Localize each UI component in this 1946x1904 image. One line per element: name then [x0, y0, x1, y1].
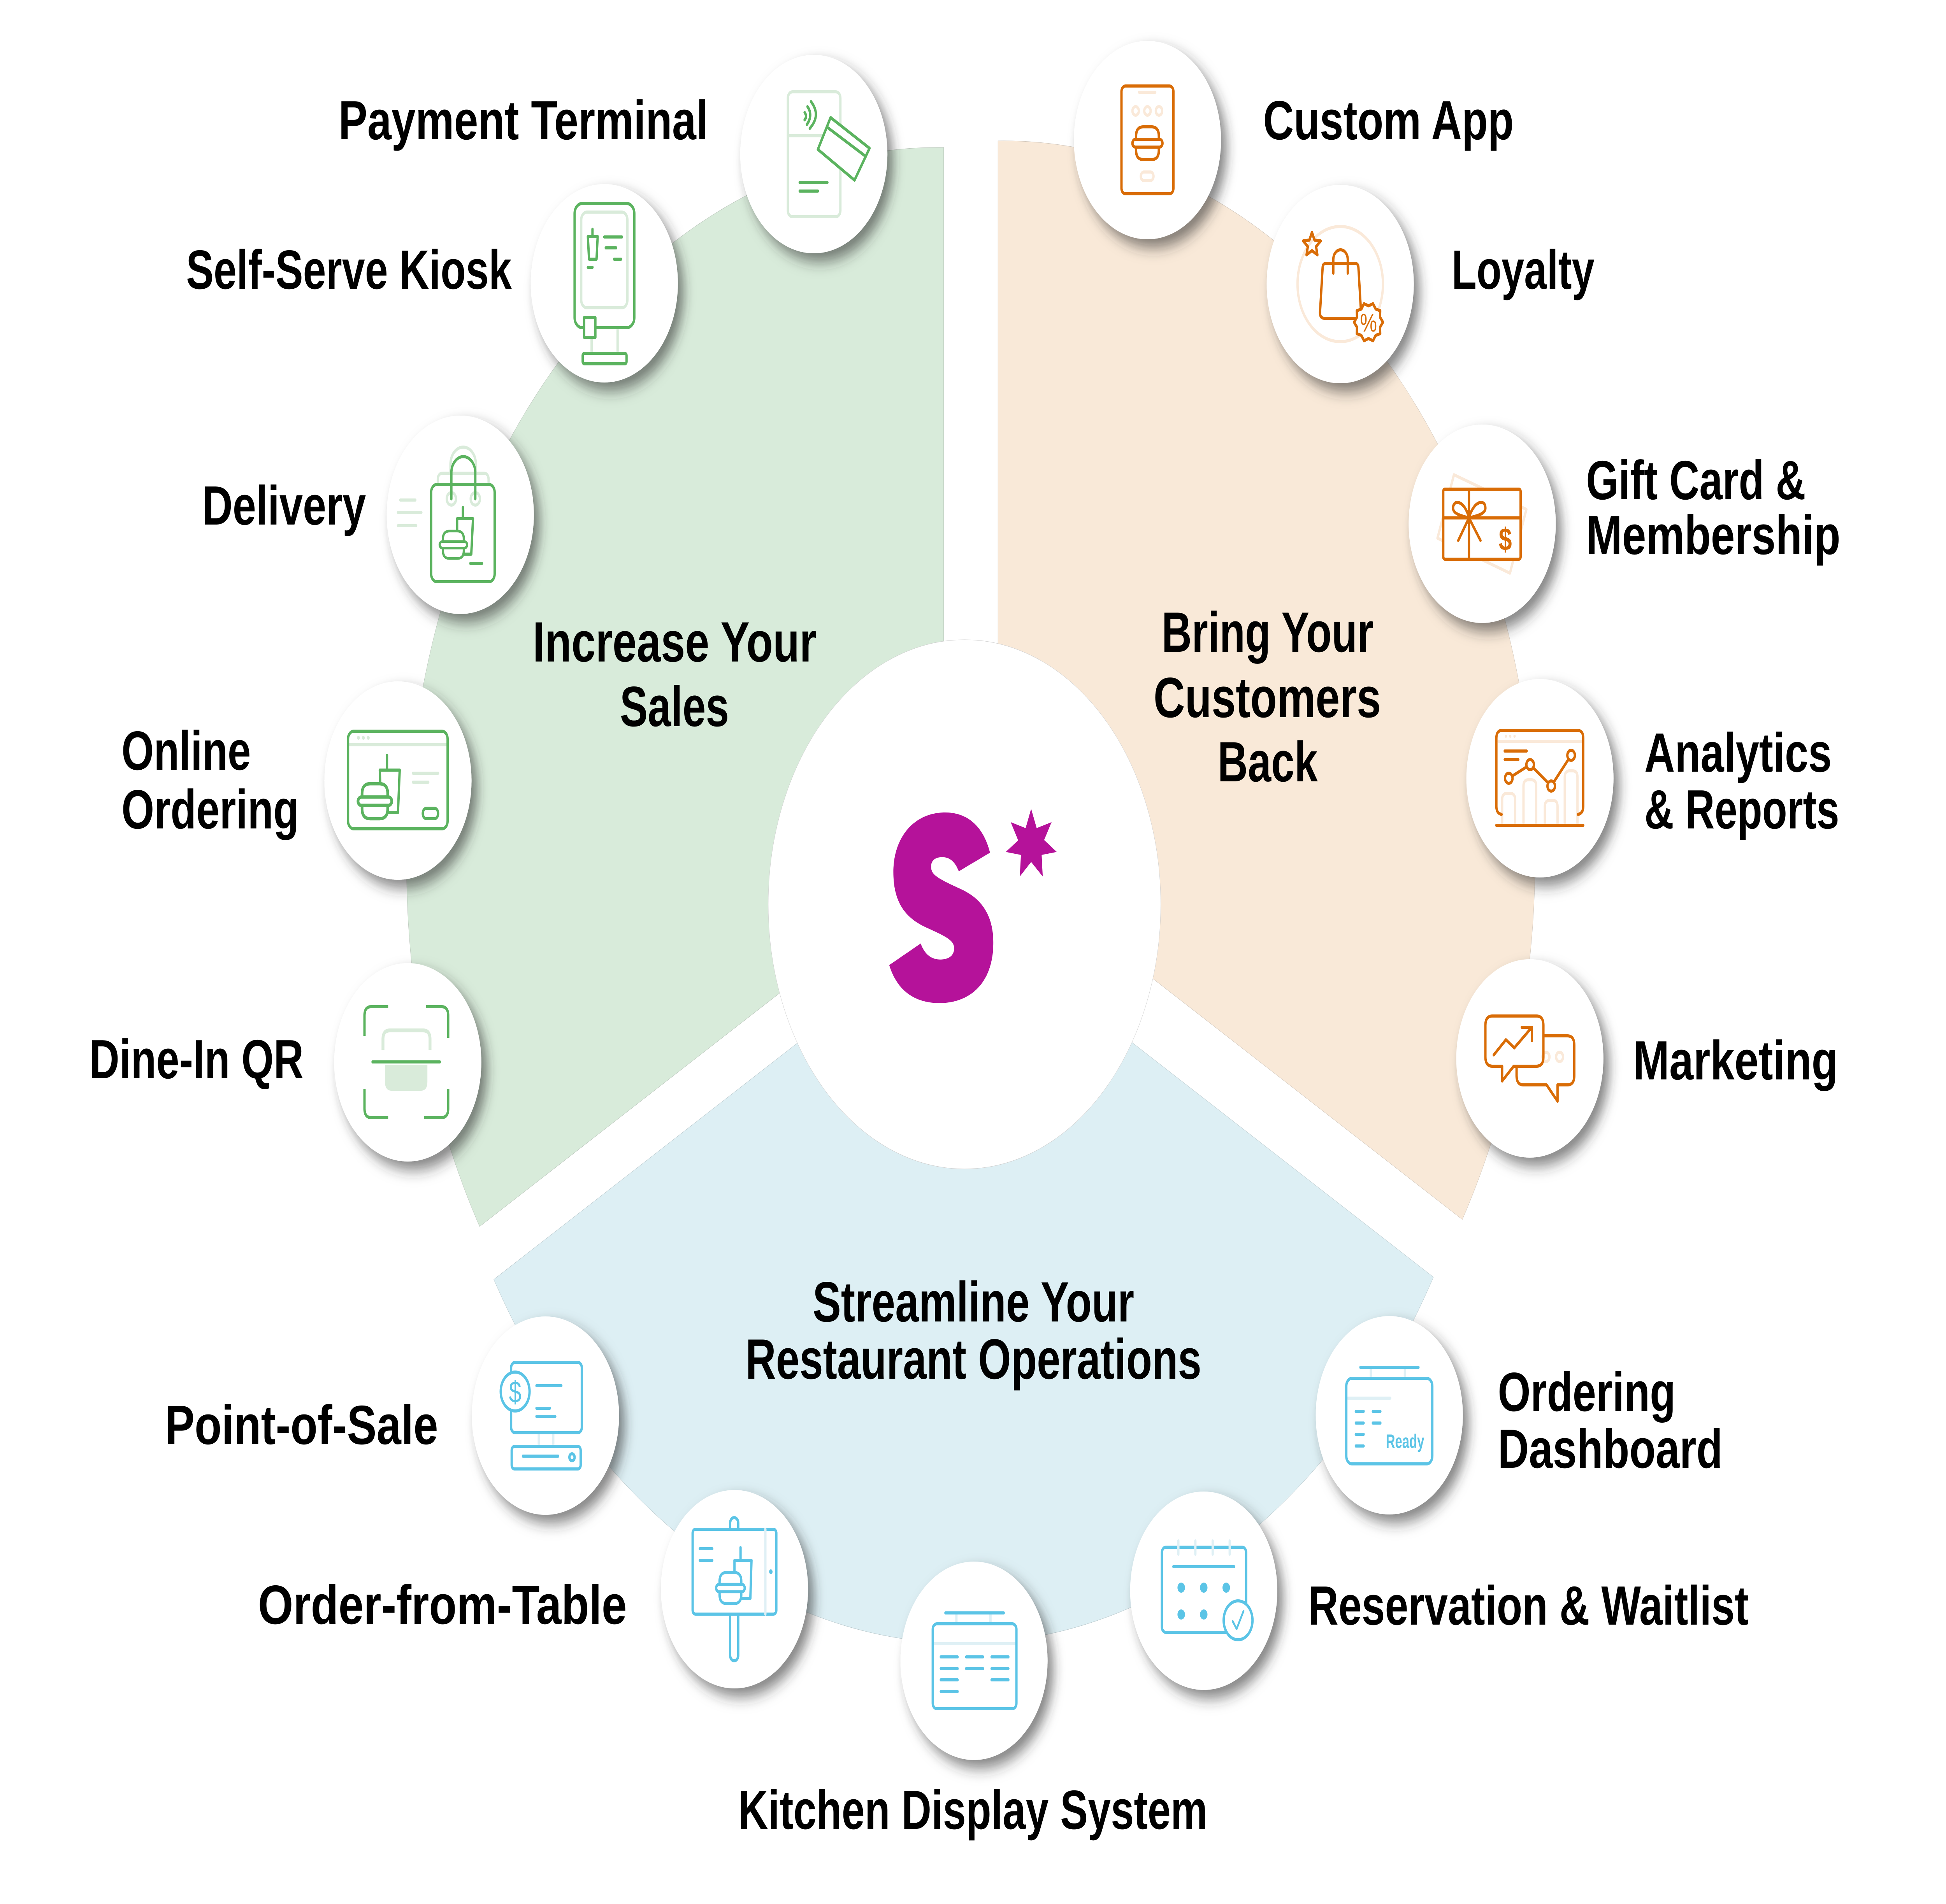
feature: Gift Card & Membership — [1409, 425, 1841, 623]
heading: Bring Your Customers Back: Customers — [1154, 666, 1381, 730]
feature: Reservation & Waitlist — [1130, 1492, 1749, 1690]
heading: Streamline Your Restaurant Operations: Streamline Your — [813, 1271, 1134, 1334]
icon: ordering dashboard — [1316, 1316, 1463, 1514]
label: Reservation & Waitlist: Reservation & Waitlist — [1308, 1575, 1749, 1637]
icon: analytics chart — [1467, 679, 1614, 877]
label: Gift Card & Membership — [1586, 450, 1841, 566]
icon: marketing chat bubbles — [1456, 959, 1604, 1158]
label: Order-from-Table: Order-from-Table — [258, 1574, 627, 1636]
label: Analytics & Reports: Analytics — [1644, 722, 1832, 784]
label: Online Ordering — [121, 720, 299, 841]
feature: Loyalty — [1266, 185, 1595, 383]
heading: Increase Your Sales — [533, 611, 817, 739]
label: Kitchen Display System: Kitchen Display System — [738, 1779, 1207, 1841]
icon: online ordering browser — [324, 681, 472, 880]
heading: Bring Your Customers Back — [1154, 601, 1381, 794]
panel: Streamline Your Restaurant Operations sector — [494, 913, 1433, 1643]
icon: reservation calendar — [1130, 1492, 1277, 1690]
feature: Analytics & Reports — [1467, 679, 1839, 877]
label: Payment Terminal: Payment Terminal — [339, 90, 708, 151]
label: Dine-In QR: Dine-In QR — [90, 1029, 304, 1090]
icon: delivery bag — [387, 416, 534, 614]
label: Custom App: Custom App — [1263, 90, 1514, 151]
logo: S with star — [889, 809, 1057, 1003]
icon: gift card: $ — [1499, 522, 1512, 557]
label: Delivery: Delivery — [202, 475, 366, 537]
icon: loyalty bag: % — [1360, 309, 1377, 337]
label: Ordering Dashboard: Ordering — [1498, 1362, 1676, 1423]
feature: Custom App — [1074, 41, 1514, 239]
feature: Delivery — [202, 416, 534, 614]
heading: Streamline Your Restaurant Operations — [745, 1271, 1201, 1391]
heading: Bring Your Customers Back: Back — [1217, 730, 1318, 794]
icon: point of sale terminal: $ — [509, 1375, 522, 1409]
label: Marketing: Marketing — [1633, 1030, 1838, 1092]
panel: Increase Your Sales sector — [406, 147, 944, 1227]
icon: QR scan frame — [334, 963, 481, 1162]
label: Analytics & Reports: & Reports — [1644, 779, 1839, 841]
label: Point-of-Sale: Point-of-Sale — [165, 1395, 438, 1456]
icon: ordering dashboard: Ready — [1386, 1431, 1424, 1452]
heading: Streamline Your Restaurant Operations: Restaurant Operations — [745, 1328, 1201, 1391]
feature: Dine-In QR — [90, 963, 481, 1162]
heading: Increase Your Sales: Sales — [620, 675, 729, 739]
label: Loyalty: Loyalty — [1452, 239, 1595, 301]
heading: Bring Your Customers Back: Bring Your — [1162, 601, 1373, 664]
feature: Kitchen Display System — [738, 1562, 1207, 1841]
feature: Order-from-Table — [258, 1490, 808, 1688]
label: Analytics & Reports — [1644, 722, 1839, 841]
panel: Bring Your Customers Back sector — [998, 141, 1535, 1220]
icon: table order sign — [661, 1490, 808, 1688]
feature: Payment Terminal — [339, 55, 887, 253]
icon: gift card — [1409, 425, 1556, 623]
heading: Increase Your Sales: Increase Your — [533, 611, 817, 674]
icon: custom app phone — [1074, 41, 1221, 239]
label: Online Ordering: Ordering — [121, 779, 299, 841]
label: Ordering Dashboard: Dashboard — [1498, 1418, 1723, 1480]
central circle with logo — [768, 640, 1161, 1169]
icon: kitchen display — [901, 1562, 1048, 1760]
feature: Self-Serve Kiosk — [186, 184, 678, 383]
feature: Online Ordering — [121, 681, 472, 880]
label: Gift Card & Membership: Membership — [1586, 505, 1841, 566]
label: Gift Card & Membership: Gift Card & — [1586, 450, 1806, 511]
icon: payment terminal with card — [740, 55, 887, 253]
label: Online Ordering: Online — [121, 720, 251, 782]
icon: kiosk — [531, 184, 678, 383]
icon: loyalty bag — [1266, 185, 1414, 383]
label: Ordering Dashboard — [1498, 1362, 1723, 1480]
feature: Marketing — [1456, 959, 1838, 1158]
icon: point of sale terminal — [472, 1316, 619, 1515]
feature: Ordering Dashboard — [1316, 1316, 1723, 1514]
label: Self-Serve Kiosk: Self-Serve Kiosk — [186, 239, 512, 301]
feature: Point-of-Sale — [165, 1316, 619, 1515]
